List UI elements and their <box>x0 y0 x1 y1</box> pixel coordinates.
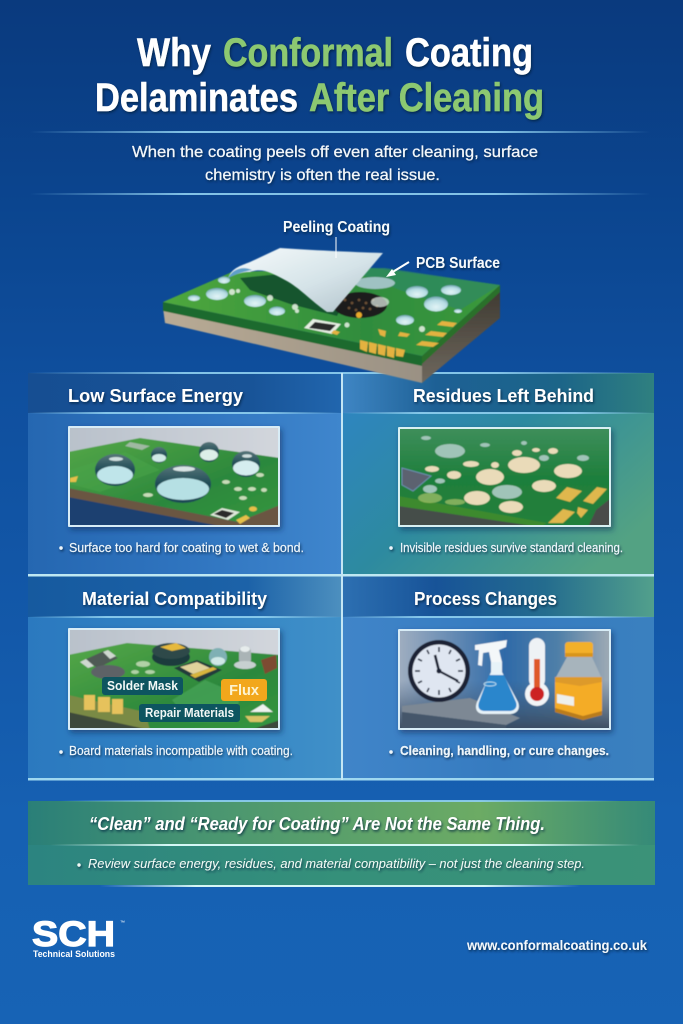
heading: Process Changes <box>414 588 557 609</box>
heading: Material Compatibility <box>82 588 268 609</box>
tag: Flux: Flux <box>229 683 259 699</box>
tag: Repair Materials: Repair Materials <box>145 706 234 720</box>
logo: SCH Technical Solutions <box>32 915 125 960</box>
panel: process changes <box>342 576 654 779</box>
panel: residues left behind <box>342 373 654 575</box>
image: residues on PCB <box>398 427 611 527</box>
heading: Low Surface Energy <box>68 385 244 406</box>
label: PCB Surface: PCB Surface <box>416 255 500 272</box>
pcb board body <box>163 268 500 383</box>
image: board materials <box>68 628 280 730</box>
bullet text: Invisible residues survive standard cleaning. <box>400 541 623 555</box>
tag: Solder Mask: Solder Mask <box>107 678 179 693</box>
panel: low surface energy <box>28 373 342 575</box>
pointer line: peeling coating <box>335 237 337 258</box>
peeling coating sheet <box>228 248 383 312</box>
icon: thermometer <box>525 638 549 706</box>
image: droplets on PCB <box>68 426 280 527</box>
bullet text: Cleaning, handling, or cure changes. <box>400 744 609 758</box>
residue deposits <box>421 436 589 513</box>
logo: SCH Technical Solutions: ™ <box>120 920 125 926</box>
title: Why <box>137 31 212 75</box>
panel: material compatibility <box>28 576 342 779</box>
logo: SCH Technical Solutions: SCH <box>32 915 115 954</box>
website url: www.conformalcoating.co.uk <box>466 937 647 953</box>
arrow: PCB surface <box>386 262 409 277</box>
banner heading: “Clean” and “Ready for Coating” Are Not the Same Thing. <box>89 814 545 834</box>
bullet text: Board materials incompatible with coating. <box>69 744 293 758</box>
title: Delaminates <box>95 76 298 120</box>
callout banner <box>28 800 655 887</box>
components <box>80 643 277 682</box>
title: Coating <box>405 31 533 75</box>
tag: Flux <box>221 679 267 701</box>
title <box>95 31 544 120</box>
icon: jar <box>555 642 602 720</box>
icon: spray bottle <box>475 640 519 714</box>
title: After Cleaning <box>309 76 544 120</box>
image: clock, spray bottle, thermometer, jar <box>398 629 611 730</box>
title: Conformal <box>223 31 393 75</box>
subtitle: chemistry is often the real issue. <box>205 167 440 184</box>
subtitle <box>132 144 538 184</box>
icon: clock <box>408 640 470 702</box>
droplets <box>188 276 462 325</box>
hero illustration: PCB with peeling coating <box>163 219 500 383</box>
bullet text: Surface too hard for coating to wet & bond. <box>69 541 304 555</box>
flat droplet under peel <box>355 277 395 289</box>
label: Peeling Coating: Peeling Coating <box>283 219 390 236</box>
banner text: Review surface energy, residues, and material compatibility – not just the cleaning step. <box>88 856 585 871</box>
heading: Residues Left Behind <box>413 385 594 406</box>
logo: SCH Technical Solutions: Technical Solutions <box>33 949 115 960</box>
water droplets <box>95 442 260 503</box>
subtitle: When the coating peels off even after cleaning, surface <box>132 144 538 161</box>
